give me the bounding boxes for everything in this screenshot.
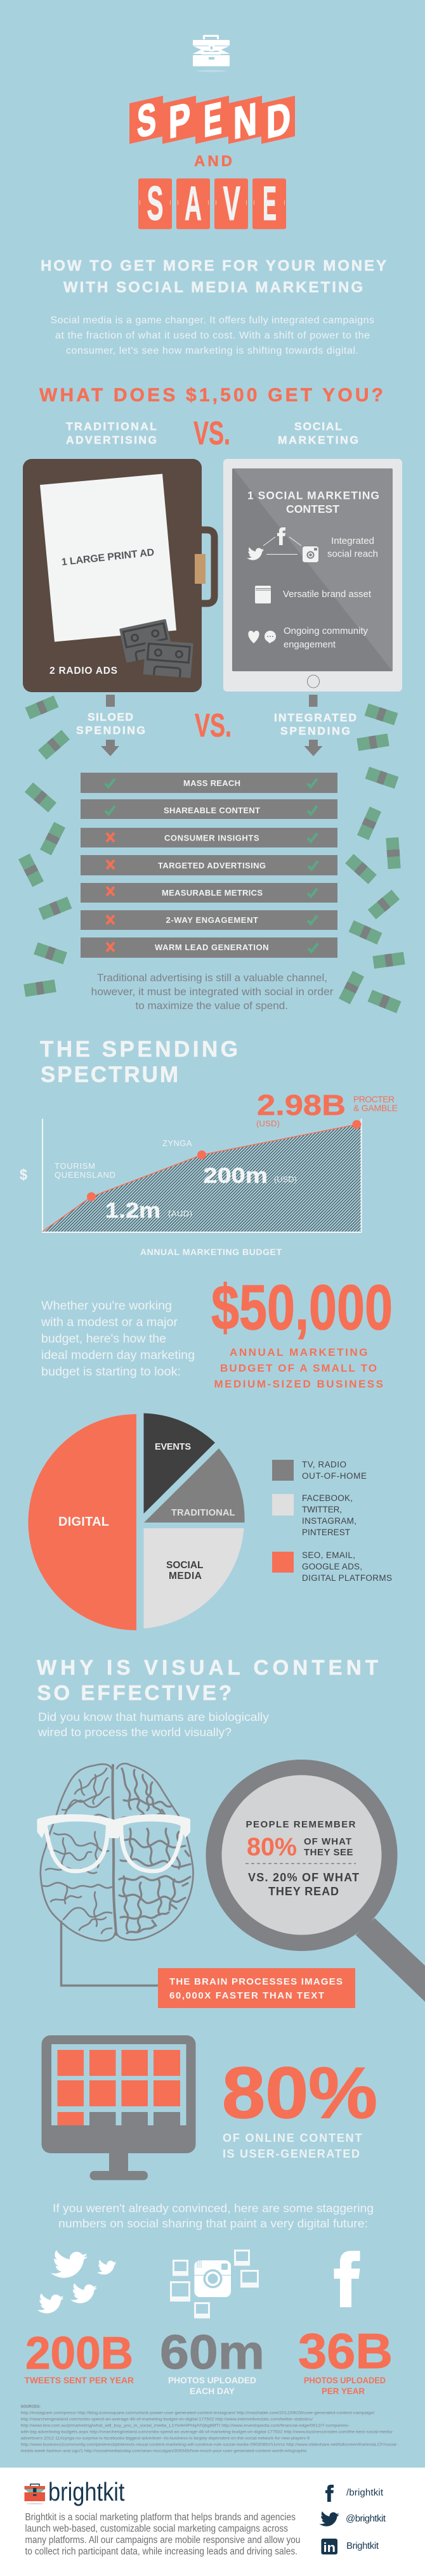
arrow: integrated — [304, 740, 322, 756]
text block: budget intro: budget, here's how the — [41, 1332, 166, 1346]
icons: twitter birds — [37, 2248, 117, 2315]
heading: social marketing: SOCIAL — [294, 420, 342, 432]
text block: about brightkit — [25, 2512, 301, 2557]
stat caption — [223, 2132, 362, 2160]
heading: social marketing — [278, 420, 358, 446]
label: y axis: $ — [20, 1166, 28, 1183]
text block: sources: http://www.brw.com.au/p/marketing/what_will_buy_you_in_social_media_L1YivfeHPHqAIVjbg88fTI http://www.investopedia.com/financial-edge/0612/7-companies- — [20, 2425, 350, 2428]
text block: staggering numbers — [53, 2202, 374, 2230]
title: SPEND: P — [169, 94, 190, 148]
comparison table — [81, 773, 337, 958]
icon: book — [255, 586, 271, 603]
legend: SEO, EMAIL, — [302, 1550, 355, 1560]
title: SAVE — [138, 177, 286, 231]
heading: why is visual content so effective — [37, 1656, 378, 1704]
heading: the spending spectrum — [40, 1037, 238, 1087]
text block: budget intro: ideal modern day marketing — [41, 1349, 195, 1362]
magnifier text: 80% — [247, 1833, 297, 1861]
legend: TV, RADIO — [302, 1460, 346, 1469]
stat: photos per day: 60m — [160, 2326, 265, 2380]
label: tourism queensland: QUEENSLAND — [55, 1170, 115, 1180]
heading: what does $1,500 get you: WHAT DOES $1,500 GET YOU? — [39, 385, 383, 406]
magnifier text: OF WHAT — [304, 1836, 351, 1847]
heading: why is visual content so effective: SO EFFECTIVE? — [37, 1681, 232, 1704]
pie labels: SOCIAL — [166, 1560, 203, 1571]
row labels: CONSUMER INSIGHTS — [164, 833, 259, 843]
icons: instagram and photos — [170, 2250, 259, 2318]
print ad — [40, 474, 176, 641]
text block: intro: at the fraction of what it used to cost. With a shift of power to the — [55, 330, 370, 341]
label: tourism queensland: TOURISM — [55, 1161, 95, 1171]
social: twitter — [319, 2511, 386, 2528]
row labels: TARGETED ADVERTISING — [158, 861, 266, 870]
title: SPEND: D — [266, 93, 291, 148]
text: integrated social reach: Integrated — [331, 536, 374, 546]
text block: about brightkit: to collect rich participant data, while increasing leads and driving sales. — [25, 2546, 298, 2557]
label: procter and gamble — [256, 1089, 398, 1128]
text block: did you know: wired to process the world visually? — [37, 1726, 232, 1739]
stat: photos per year: PHOTOS UPLOADED — [304, 2375, 386, 2385]
label: zynga: 200m — [203, 1164, 268, 1188]
heading: integrated spending: SPENDING — [280, 724, 350, 737]
social: linkedin — [321, 2539, 379, 2555]
legend — [272, 1460, 392, 1583]
illustration: monitor — [42, 2035, 195, 2180]
stat: 80% user-generated: 80% — [222, 2053, 377, 2134]
text block: did you know — [37, 1711, 269, 1739]
text block: traditional note: however, it must be integrated with social in order — [91, 986, 334, 998]
stat: photos per day: EACH DAY — [190, 2386, 235, 2396]
text: ongoing community engagement — [284, 626, 368, 650]
stat caption — [214, 1346, 383, 1390]
legend: OUT-OF-HOME — [302, 1471, 367, 1481]
arrow: siloed — [101, 740, 119, 756]
row labels: MASS REACH — [183, 778, 240, 788]
heading: traditional advertising — [66, 420, 157, 446]
text: ongoing community engagement: Ongoing community — [284, 626, 368, 636]
text block: did you know: Did you know that humans are biologically — [38, 1711, 269, 1723]
print ad: 1 LARGE PRINT AD — [61, 547, 155, 568]
text block: budget intro — [41, 1299, 195, 1379]
title: AND: AND — [194, 153, 232, 170]
row labels: 2-WAY ENGAGEMENT — [166, 915, 258, 925]
stat: tweets: TWEETS SENT PER YEAR — [24, 2375, 134, 2385]
label: tourism queensland: 1.2m — [105, 1199, 160, 1223]
social: twitter: @brightkit — [346, 2513, 386, 2524]
text: integrated social reach: social reach — [327, 549, 378, 559]
text block: sources — [20, 2405, 398, 2454]
stat caption: MEDIUM-SIZED BUSINESS — [214, 1378, 383, 1390]
stat: photos per day: PHOTOS UPLOADED — [168, 2375, 256, 2385]
text: versatile brand asset: Versatile brand asset — [283, 589, 372, 600]
connector stems — [106, 695, 317, 707]
social: facebook — [325, 2485, 384, 2502]
heading: integrated spending — [274, 711, 356, 737]
heading: siloed spending: SPENDING — [76, 724, 145, 737]
panel: briefcase — [23, 459, 214, 692]
text block: traditional note: to maximize the value of spend. — [136, 1000, 288, 1012]
text block: sources: http://instagram.com/press/ http://blog.iconosquare.com/unlock-power-user-generated-content-instagram/ http://mashable.com/2012/06/26/user-generated-content-campaign/ — [20, 2412, 375, 2416]
illustration: glasses — [37, 1814, 190, 1871]
footer logo: brightkit: brightkit — [48, 2477, 125, 2506]
title: SPEND: E — [204, 93, 222, 147]
text block: sources: http://www.business2community.com/pinterest/pinterests-visual-content-marketing-will-continue-rule-social-media-0903085#!UuVcx http://www.slideshare.net/fullscreen/KarinnaLCF/social- — [20, 2444, 398, 2447]
heading: why is visual content so effective: WHY IS VISUAL CONTENT — [37, 1656, 378, 1679]
label: tourism queensland: (AUD) — [168, 1209, 192, 1218]
illustration: magnifying glass — [206, 1760, 425, 2002]
stat caption: OF ONLINE CONTENT — [223, 2132, 362, 2144]
text block: intro: Social media is a game changer. It offers fully integrated campaigns — [51, 315, 374, 326]
legend: FACEBOOK, — [302, 1493, 353, 1503]
stat caption: IS USER-GENERATED — [223, 2148, 360, 2160]
heading: subtitle — [41, 257, 386, 296]
text block: about brightkit: launch web-based, customizable social marketing campaigns across — [25, 2523, 288, 2534]
pie labels: TRADITIONAL — [171, 1508, 235, 1518]
heading: subtitle: WITH SOCIAL MEDIA MARKETING — [63, 279, 363, 296]
text block: staggering numbers: If you weren't already convinced, here are some staggering — [53, 2202, 374, 2215]
social: facebook: /brightkit — [346, 2487, 384, 2498]
heading: the spending spectrum: THE SPENDING — [40, 1037, 238, 1062]
heading: traditional advertising: TRADITIONAL — [66, 420, 157, 432]
text block: budget intro: Whether you're working — [41, 1299, 172, 1313]
heading: vs: VS. — [195, 707, 232, 744]
callout: brain processes images — [158, 1968, 355, 2008]
contest heading: CONTEST — [286, 503, 339, 515]
heading: siloed spending: SILOED — [88, 711, 133, 723]
row labels: WARM LEAD GENERATION — [155, 943, 269, 952]
legend: DIGITAL PLATFORMS — [302, 1573, 392, 1583]
icons: heart and bubble — [248, 631, 276, 643]
stat: photos per year: PER YEAR — [322, 2386, 365, 2396]
heading: vs: VS. — [193, 415, 230, 452]
cassettes — [119, 619, 193, 678]
row labels: MEASURABLE METRICS — [162, 888, 263, 898]
legend: PINTEREST — [302, 1528, 350, 1537]
title: SAVE: S — [147, 177, 164, 231]
panel: tablet — [223, 459, 402, 692]
heading: integrated spending: INTEGRATED — [274, 711, 356, 724]
social: linkedin: Brightkit — [346, 2541, 379, 2551]
legend: GOOGLE ADS, — [302, 1562, 362, 1571]
text block: intro — [51, 315, 374, 356]
row marks — [105, 778, 318, 952]
stat: photos per year: 36B — [298, 2323, 393, 2379]
magnifier text: THEY SEE — [304, 1847, 353, 1858]
stat: tweets: 200B — [25, 2328, 133, 2379]
magnifier text: VS. 20% OF WHAT — [248, 1871, 359, 1884]
text: integrated social reach — [327, 536, 378, 559]
text block: budget intro: budget is starting to look: — [41, 1365, 181, 1379]
pie labels — [58, 1442, 235, 1581]
heading: the spending spectrum: SPECTRUM — [41, 1062, 178, 1087]
icons: social triangle — [247, 527, 318, 562]
pie labels: DIGITAL — [58, 1515, 109, 1529]
label: procter and gamble: 2.98B — [257, 1089, 346, 1121]
title: SAVE: A — [185, 177, 202, 231]
chart: pie — [28, 1414, 245, 1630]
callout: brain processes images: THE BRAIN PROCESSES IMAGES — [169, 1976, 343, 1987]
magnifier text — [246, 1819, 359, 1898]
label: procter and gamble: PROCTER — [353, 1094, 395, 1104]
heading: social marketing: MARKETING — [278, 434, 358, 446]
heading: traditional advertising: ADVERTISING — [66, 434, 157, 446]
title: SPEND — [129, 93, 295, 149]
text block: sources: http://searchengineland.com/smbs-spend-an-average-46-of-marketing-budget-on-digital-177502 http://www.internetlivestats.com/twitter-statistics/ — [20, 2418, 313, 2422]
title: SAVE: E — [263, 177, 277, 231]
connector: brain to callout — [61, 1921, 158, 1985]
text: ongoing community engagement: engagement — [284, 639, 336, 650]
stat caption: BUDGET OF A SMALL TO — [220, 1362, 377, 1374]
row labels — [155, 778, 269, 952]
text block: sources: with-big-advertising-budgets.aspx http://searchengineland.com/smbs-spend-an-average-46-of-marketing-budget-on-digital-177502 http://www.businessinsider.com/the-best-social-media- — [20, 2431, 393, 2435]
heading: subtitle: HOW TO GET MORE FOR YOUR MONEY — [41, 257, 386, 274]
chart: spending spectrum — [20, 1089, 398, 1257]
label: zynga: ZYNGA — [162, 1138, 192, 1148]
text block: intro: consumer, let's see how marketing is shifting towards digital. — [66, 345, 358, 356]
text block: budget intro: with a modest or a major — [41, 1316, 178, 1329]
magnifier text: PEOPLE REMEMBER — [246, 1819, 356, 1830]
contest heading: 1 SOCIAL MARKETING — [247, 489, 379, 502]
text block: about brightkit: many platforms. All our campaigns are mobile responsive and allow you — [25, 2535, 301, 2546]
clasp — [195, 554, 206, 584]
pie labels: MEDIA — [169, 1571, 202, 1581]
social: linkedin: in — [324, 2541, 336, 2555]
label: procter and gamble: & GAMBLE — [353, 1103, 398, 1113]
title: SPEND: S — [137, 94, 156, 148]
contest heading — [247, 489, 379, 515]
text block: traditional note: Traditional advertising is still a valuable channel, — [97, 972, 327, 984]
icon: toolbox — [193, 35, 230, 72]
callout: brain processes images: 60,000X FASTER THAN TEXT — [169, 1990, 324, 2001]
label: procter and gamble: (USD) — [256, 1119, 280, 1128]
text block: staggering numbers: numbers on social sharing that paint a very digital future: — [58, 2217, 368, 2230]
text block: traditional note — [91, 972, 334, 1012]
label: tourism queensland — [55, 1161, 192, 1223]
magnifier text: THEY READ — [268, 1885, 339, 1898]
heading: siloed spending — [76, 711, 145, 737]
text block: sources: media-week-fashion-and-ugc/1 http://socialmediatoday.com/sean-mccolgan/309345/how-much-your-user-generated-content-worth-infographic — [20, 2450, 307, 2454]
label: zynga — [162, 1138, 297, 1188]
icon: facebook — [334, 2251, 360, 2307]
panel: briefcase: 2 RADIO ADS — [49, 666, 117, 676]
label: zynga: (USD) — [274, 1175, 297, 1184]
pie labels: EVENTS — [155, 1442, 191, 1452]
stat caption: ANNUAL MARKETING — [230, 1346, 368, 1358]
money bills — [18, 695, 405, 1013]
title: SAVE: V — [223, 177, 240, 231]
text block: about brightkit: Brightkit is a social marketing platform that helps brands and agencies — [25, 2512, 296, 2523]
footer logo: brightkit — [24, 2477, 125, 2506]
row labels: SHAREABLE CONTENT — [164, 806, 260, 815]
label: x axis: ANNUAL MARKETING BUDGET — [140, 1247, 282, 1257]
legend: TWITTER, — [302, 1505, 342, 1514]
legend: INSTAGRAM, — [302, 1516, 356, 1526]
illustration: brain — [41, 1763, 193, 1941]
title: SPEND: N — [233, 94, 257, 149]
text block: sources: advertisers-2012-11#zynga-no-surprise-is-facebooks-biggest-advertiser--its-business-is-largely-dependent-on-the-social-network-for-new-players-9 — [20, 2437, 310, 2441]
text block: sources: SOURCES: — [20, 2405, 41, 2409]
